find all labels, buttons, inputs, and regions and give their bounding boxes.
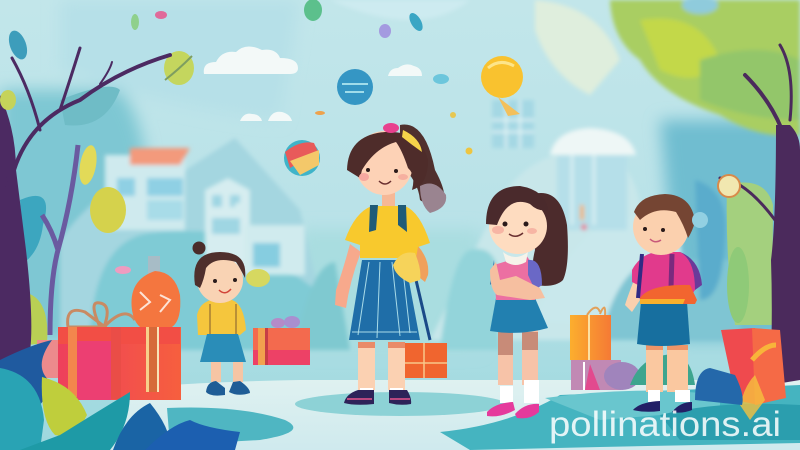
clouds bbox=[204, 46, 422, 121]
thin purple sapling bbox=[42, 145, 78, 335]
shoes bbox=[344, 390, 411, 405]
watermark text: pollinations.ai bbox=[549, 404, 781, 444]
neck bbox=[382, 190, 395, 206]
socks bbox=[500, 380, 539, 403]
third child bbox=[625, 194, 702, 413]
yellow balloon bbox=[481, 56, 523, 116]
right tree bbox=[610, 0, 800, 385]
skirt bbox=[349, 260, 420, 340]
bush behind third child bbox=[630, 354, 695, 385]
ponytail bbox=[530, 193, 568, 286]
collar bbox=[503, 252, 528, 265]
pond shadows bbox=[167, 385, 800, 450]
green bush leaves bbox=[727, 182, 773, 325]
backpack straps bbox=[369, 205, 407, 232]
shirt bbox=[345, 206, 430, 258]
skirt bbox=[490, 298, 548, 333]
left tree bbox=[0, 28, 170, 378]
pink bow bbox=[383, 123, 422, 152]
gift: orange centre bbox=[405, 343, 447, 378]
background tonal washes bbox=[0, 0, 800, 350]
arm bbox=[625, 275, 640, 312]
legs bbox=[498, 330, 538, 385]
gift: big red bbox=[37, 303, 181, 400]
red bag bbox=[721, 328, 786, 420]
face bbox=[643, 227, 665, 242]
face bbox=[213, 278, 237, 293]
shirt bbox=[632, 252, 695, 300]
orange balloon figure bbox=[131, 256, 180, 327]
gift: orange stacked right bbox=[570, 307, 640, 390]
ponytail bbox=[400, 125, 444, 202]
head bbox=[633, 199, 689, 255]
foreground leaves left bbox=[0, 340, 240, 450]
tower on hill bbox=[492, 100, 534, 148]
floating balls and confetti bbox=[115, 0, 523, 287]
hand bag bbox=[393, 252, 420, 283]
skirt bbox=[200, 334, 246, 362]
shirt bbox=[197, 300, 246, 335]
socks bbox=[648, 390, 690, 402]
small girl bbox=[192, 242, 250, 396]
hair bun bbox=[192, 242, 206, 254]
shoes bbox=[487, 402, 539, 418]
blue rocks bbox=[695, 368, 743, 405]
arm bbox=[490, 262, 545, 300]
legs bbox=[646, 345, 688, 392]
confetti bbox=[115, 0, 472, 287]
building centre left bbox=[205, 178, 305, 275]
hair bbox=[194, 252, 245, 288]
hair bbox=[347, 132, 428, 190]
gift: small red bbox=[253, 316, 310, 365]
face bbox=[492, 222, 537, 236]
hair bbox=[634, 194, 695, 238]
head bbox=[489, 198, 547, 254]
socks bbox=[360, 388, 403, 391]
legs bbox=[211, 360, 243, 382]
strap bbox=[638, 254, 642, 298]
background hills bbox=[60, 0, 740, 350]
hair bbox=[486, 186, 548, 225]
canopy bbox=[610, 0, 800, 136]
leaves behind trunk bbox=[20, 87, 120, 345]
right girl bbox=[486, 186, 568, 418]
arms bbox=[335, 244, 361, 308]
strap bag bbox=[416, 280, 430, 340]
backpack bbox=[675, 252, 702, 290]
skirt bbox=[637, 302, 690, 346]
domed building bbox=[550, 128, 636, 230]
branches bbox=[720, 45, 791, 220]
branches bbox=[2, 48, 170, 190]
striped ball bbox=[284, 140, 320, 176]
trunk bbox=[770, 125, 800, 385]
shirt bbox=[494, 255, 540, 300]
head bbox=[197, 257, 243, 303]
legs bbox=[358, 342, 405, 390]
leaves bbox=[0, 28, 126, 233]
ground path bbox=[110, 380, 800, 450]
belt pouch bbox=[640, 285, 697, 304]
centre girl bbox=[335, 123, 446, 405]
shoes bbox=[633, 401, 692, 413]
head bbox=[355, 131, 413, 195]
backpack bbox=[528, 260, 542, 290]
trunk bbox=[0, 95, 31, 378]
face bbox=[359, 168, 408, 184]
blue ball bbox=[337, 69, 373, 105]
leaf top left bbox=[164, 51, 194, 85]
building left bbox=[105, 148, 190, 230]
shoes bbox=[206, 381, 250, 396]
